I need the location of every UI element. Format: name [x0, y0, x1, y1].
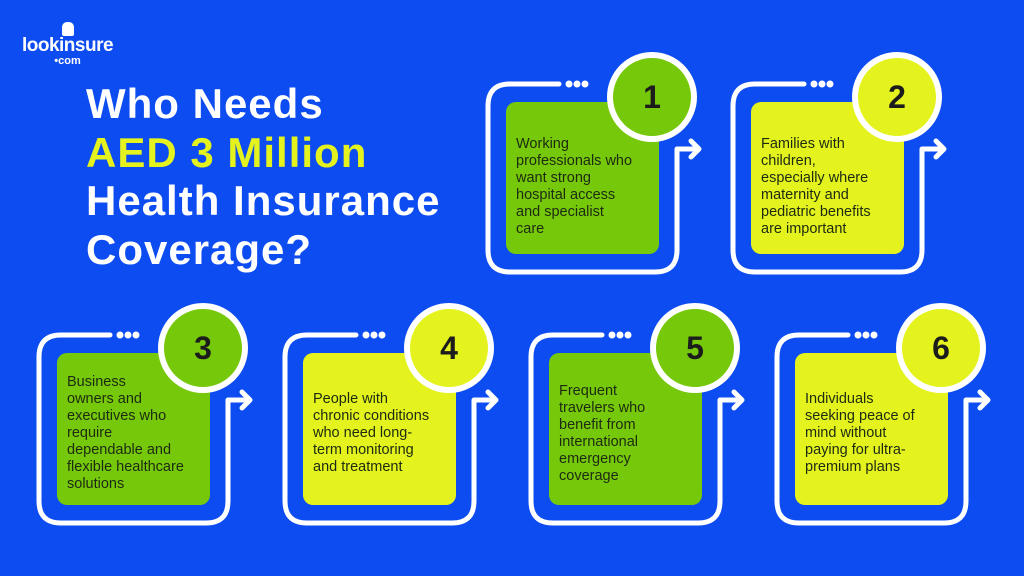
- card 4: People with: [313, 391, 388, 407]
- card 6: [774, 303, 990, 526]
- card 6: premium plans: [805, 459, 900, 475]
- card 3: executives who: [67, 408, 166, 424]
- card 1: care: [516, 221, 544, 237]
- card 4: term monitoring: [313, 442, 414, 458]
- card 3: solutions: [67, 476, 124, 492]
- card 3: require: [67, 425, 112, 441]
- card 6: mind without: [805, 425, 886, 441]
- card 4: 4: [440, 330, 458, 366]
- logo: •com: [54, 55, 81, 67]
- card 2: 2: [888, 79, 906, 115]
- card 5: Frequent: [559, 383, 617, 399]
- card 2: Families with: [761, 136, 845, 152]
- card 6: paying for ultra-: [805, 442, 906, 458]
- card 3: [36, 303, 252, 526]
- card 4: and treatment: [313, 459, 402, 475]
- card 4: chronic conditions: [313, 408, 429, 424]
- card 5: 5: [686, 330, 704, 366]
- title: Coverage?: [86, 226, 312, 272]
- card 1: hospital access: [516, 187, 615, 203]
- card 2: [730, 52, 946, 274]
- card 6: 6: [932, 330, 950, 366]
- card 4: [282, 303, 498, 526]
- card 2: children,: [761, 153, 816, 169]
- card 2: pediatric benefits: [761, 204, 871, 220]
- card 2: especially where: [761, 170, 868, 186]
- card 1: [486, 52, 702, 274]
- card 1: want strong: [516, 170, 591, 186]
- card 3: flexible healthcare: [67, 459, 184, 475]
- logo: [22, 22, 113, 67]
- title: Health Insurance: [86, 177, 440, 224]
- card 1: 1: [643, 79, 661, 115]
- card 6: seeking peace of: [805, 408, 915, 424]
- logo: lookinsure: [22, 35, 113, 56]
- card 6: Individuals: [805, 391, 874, 407]
- title: Who Needs: [86, 80, 324, 127]
- card 5: travelers who: [559, 400, 645, 416]
- card 4: who need long-: [313, 425, 412, 441]
- icon: mascot: [62, 22, 74, 36]
- card 5: benefit from: [559, 417, 636, 433]
- title: [86, 80, 440, 272]
- card 2: maternity and: [761, 187, 849, 203]
- card 5: emergency: [559, 451, 631, 467]
- card 5: international: [559, 434, 638, 450]
- card 3: owners and: [67, 391, 142, 407]
- card 5: coverage: [559, 468, 619, 484]
- card 5: [528, 303, 744, 526]
- card 3: dependable and: [67, 442, 171, 458]
- card 3: Business: [67, 374, 126, 390]
- card 1: Working: [516, 136, 569, 152]
- card 2: are important: [761, 221, 846, 237]
- card 1: and specialist: [516, 204, 604, 220]
- card 3: 3: [194, 330, 212, 366]
- title: AED 3 Million: [86, 128, 367, 176]
- card 1: professionals who: [516, 153, 632, 169]
